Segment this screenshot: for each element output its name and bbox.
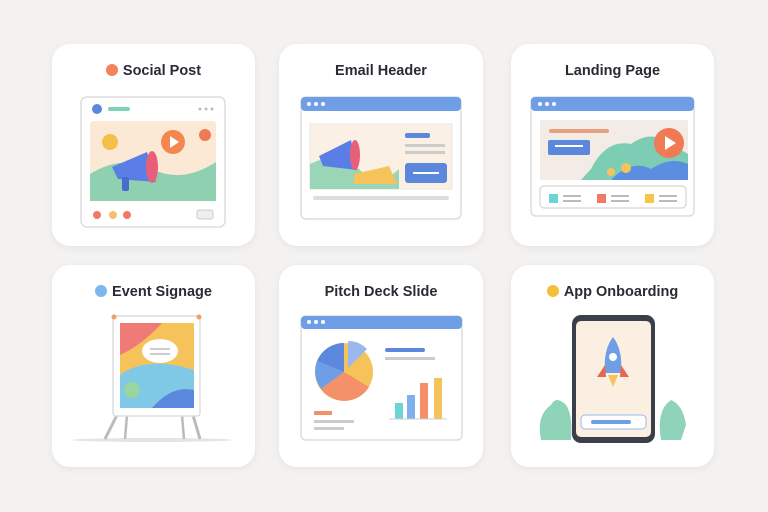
heading: event signage: Event Signage: [112, 284, 212, 300]
heading: pitch deck slide: Pitch Deck Slide: [325, 284, 437, 300]
illustration: slide with charts: [300, 315, 463, 441]
heading: app onboarding: App Onboarding: [564, 284, 678, 300]
heading: email header: Email Header: [335, 63, 427, 79]
card: landing page: [511, 44, 714, 246]
heading: landing page: Landing Page: [565, 63, 660, 79]
illustration: landing page mockup: [530, 96, 695, 217]
card: email header: [279, 44, 483, 246]
heading: social post: Social Post: [123, 63, 201, 79]
card: social post: [52, 44, 255, 246]
illustration: phone with rocket: [540, 315, 686, 443]
card: app onboarding: [511, 265, 714, 467]
card: event signage: [52, 265, 255, 467]
illustration: email mockup: [300, 96, 462, 220]
illustration: social post mockup: [80, 96, 226, 228]
illustration: easel sign: [72, 314, 232, 442]
card: pitch deck slide: [279, 265, 483, 467]
